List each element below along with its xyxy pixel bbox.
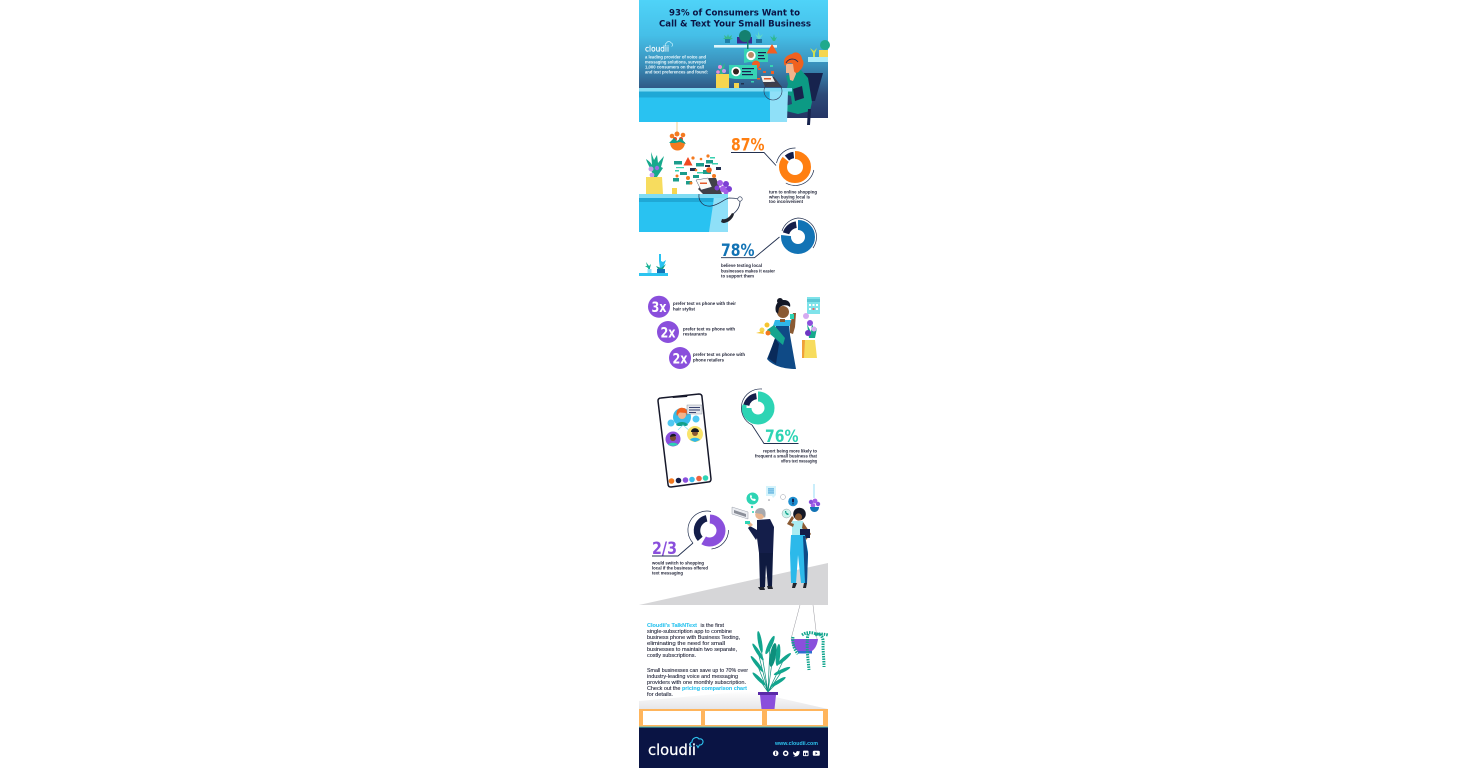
text: restaurants (683, 326, 735, 336)
avatar: purple (666, 425, 691, 446)
donut chart (776, 148, 814, 185)
text block: about TalkNText: business phone with Business Texting, (647, 635, 740, 641)
caption: believe texting local (721, 263, 762, 268)
avatar: red hair (668, 405, 702, 426)
social icons (773, 750, 820, 756)
hanging planter (791, 605, 828, 670)
icon: message dots (741, 65, 774, 84)
phone cord and handset (699, 194, 742, 223)
floating screen (732, 507, 748, 519)
shelf with plants (714, 30, 777, 54)
floor (639, 563, 828, 605)
caption: would switch to shopping (651, 561, 704, 566)
value: 76% (765, 427, 799, 446)
text: restaurants: restaurants (683, 332, 708, 336)
intro text: 1,000 consumers on their call (645, 64, 704, 70)
website: www.cloudii.com (774, 741, 818, 747)
leader line (731, 152, 776, 166)
icon: phone bubble outline (782, 509, 791, 518)
logo: cloudii (645, 41, 673, 54)
text: restaurants: prefer text vs phone with (683, 326, 735, 332)
list: text vs phone preferences (648, 296, 745, 369)
icon: teal phone bubble (746, 492, 758, 513)
intro text (645, 54, 708, 74)
badge: 2x restaurants: 2x (660, 325, 676, 341)
stat: 76% (741, 389, 818, 464)
caption (755, 449, 818, 464)
phone illustration (658, 394, 711, 487)
footer (639, 726, 828, 768)
text: hair stylist: hair stylist (673, 306, 696, 312)
caption: to support them (721, 274, 754, 278)
text block: about TalkNText: costly subscriptions. (647, 653, 696, 659)
small shelf with plants (639, 254, 668, 276)
donut chart (782, 218, 817, 253)
text block: about TalkNText (647, 623, 740, 659)
caption: report being more likely to (763, 449, 817, 454)
stat: 78% (721, 218, 817, 278)
icon: microphone (780, 494, 798, 506)
intro text: messaging solutions, surveyed (645, 60, 706, 64)
intro text: a leading provider of voice and (645, 54, 706, 60)
caption: businesses makes it easier (721, 268, 775, 273)
woman with orange hair (784, 52, 812, 114)
donut chart (741, 389, 773, 425)
logo: cloudii: cloudii (645, 44, 669, 54)
text block: savings: providers with one monthly subscription. (647, 680, 746, 686)
man with phone (745, 508, 774, 590)
stat: 87% (731, 136, 817, 204)
text block: savings (647, 668, 748, 698)
text: hair stylist: prefer text vs phone with their (673, 301, 736, 306)
caption (768, 189, 817, 204)
text block: about TalkNText: businesses to maintain two separate, (647, 647, 737, 653)
text: phone retailers (693, 352, 745, 362)
logo: cloudii: cloudii (648, 742, 696, 759)
value: 87% (731, 136, 765, 155)
value: 2/3 (652, 539, 677, 558)
title: Call & Text Your Small Business (659, 19, 811, 30)
chat bubble: lower (729, 65, 757, 79)
app icons (669, 475, 708, 484)
panel: header (639, 0, 830, 125)
caption: offers text messaging (781, 459, 817, 464)
calendar (807, 297, 820, 314)
caption (721, 263, 775, 278)
chair (797, 73, 823, 101)
intro text: and text preferences and found: (645, 70, 708, 74)
text block: savings: for details. (647, 692, 673, 698)
shelf (639, 709, 828, 727)
icon: message bubble (766, 486, 776, 501)
caption (651, 561, 708, 576)
text: phone retailers: phone retailers (693, 358, 725, 362)
floor haze (639, 691, 828, 709)
hanging purple flowers (809, 484, 820, 512)
icon: warning (766, 44, 778, 54)
caption: frequent a small business that (755, 454, 818, 459)
text block: about TalkNText: eliminating the need for small (647, 641, 725, 647)
value: 78% (721, 241, 755, 260)
woman on phone (787, 508, 811, 588)
florist woman (756, 298, 796, 369)
text: phone retailers: prefer text vs phone with (693, 352, 745, 357)
text block: about TalkNText: single-subscription app to combine (647, 629, 732, 635)
text block: savings: Check out the pricing comparison chart (647, 686, 747, 692)
desk (639, 88, 811, 125)
caption: too inconvenient (769, 199, 804, 204)
caption: turn to online shopping (769, 189, 817, 194)
stat: 2/3 (651, 511, 729, 576)
logo: cloudii (648, 738, 703, 759)
title (659, 8, 811, 30)
right shelf (808, 40, 830, 62)
laptop (761, 76, 782, 100)
hanging plant: orange pot (669, 122, 686, 150)
plant in yellow bag (646, 152, 677, 194)
avatar: yellow (687, 426, 703, 442)
leader line (721, 237, 780, 258)
text: hair stylist (673, 301, 736, 312)
text block: about TalkNText: Cloudii's TalkNText is the first (647, 623, 724, 629)
laptop and purple flowers (696, 178, 732, 194)
badge: 3x: 3x (652, 300, 667, 316)
chat bubble: top (744, 49, 768, 63)
donut chart (688, 511, 729, 549)
desk 2 (639, 194, 728, 232)
potted plant (749, 631, 792, 709)
text block: savings: industry-leading voice and messaging (647, 674, 738, 680)
text block: savings: Small businesses can save up to 70% over (647, 668, 748, 674)
badge: 2x phone retailers: 2x (672, 351, 688, 367)
title: 93% of Consumers Want to (669, 8, 800, 18)
cloud of message icons (673, 154, 721, 184)
leader line (652, 543, 693, 556)
flower bag (802, 313, 817, 358)
yellow bag with flowers (716, 62, 739, 88)
caption: text messaging (652, 571, 683, 576)
caption: local if the business offered (652, 566, 708, 571)
icon: alert circle (752, 60, 760, 68)
caption: when buying local is (768, 194, 811, 199)
leader line (752, 425, 798, 444)
